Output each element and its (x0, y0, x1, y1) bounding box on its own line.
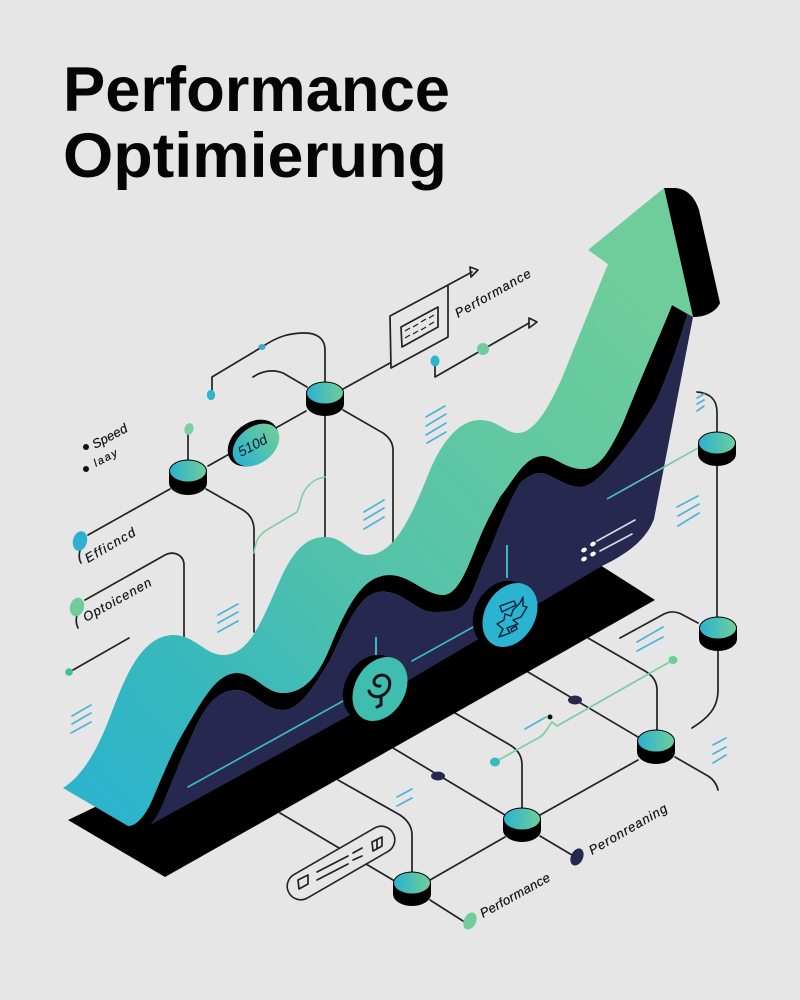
oval badge 510d: 510d (235, 430, 271, 460)
small dots on upper lines (65, 344, 266, 676)
icon: teal disc with symbol (331, 644, 419, 732)
node: lower left (393, 872, 431, 906)
network lines: lower grid (280, 638, 718, 921)
hatch marks (71, 394, 726, 806)
oval badge 510d (219, 410, 288, 476)
arrow head side (664, 188, 720, 317)
label: Performance (bottom): Performance (477, 870, 553, 921)
title (63, 55, 450, 191)
bullet list: speed (83, 420, 131, 472)
label: Efficncd: Efficncd (82, 524, 139, 566)
title: Optimierung (63, 121, 447, 191)
node: left (169, 460, 207, 495)
bullet list: speed: Speed (89, 420, 131, 452)
label: Optoiceen: Optoicenen (80, 575, 154, 625)
navy junction dots (431, 696, 582, 780)
icon: blue disc with map symbol (461, 570, 549, 658)
label: Peronreaning (568, 800, 670, 868)
black band along the wave (128, 305, 693, 826)
label: Performance (top): Performance (452, 266, 533, 321)
network lines: right column (620, 392, 718, 728)
node: right upper (698, 432, 736, 466)
panel: screen frame with arrow (390, 267, 478, 368)
navy chart body (150, 312, 693, 825)
navy chart details (188, 448, 698, 787)
node: lower centre (503, 808, 541, 842)
node: top centre (306, 382, 344, 416)
node: lower right (637, 730, 675, 764)
pill label (282, 821, 400, 905)
label: Peronreaning: Peronreaning (586, 800, 670, 858)
title: Performance (63, 55, 450, 125)
node: right lower (699, 616, 737, 651)
network lines: upper left (73, 333, 393, 670)
green signal line (490, 656, 678, 766)
arrow line with dots (430, 318, 537, 377)
gradient wave with arrow (63, 188, 693, 826)
bullet list: speed: laay (92, 447, 121, 470)
floor platform (68, 565, 655, 877)
label: Performance (bottom) (461, 870, 553, 932)
